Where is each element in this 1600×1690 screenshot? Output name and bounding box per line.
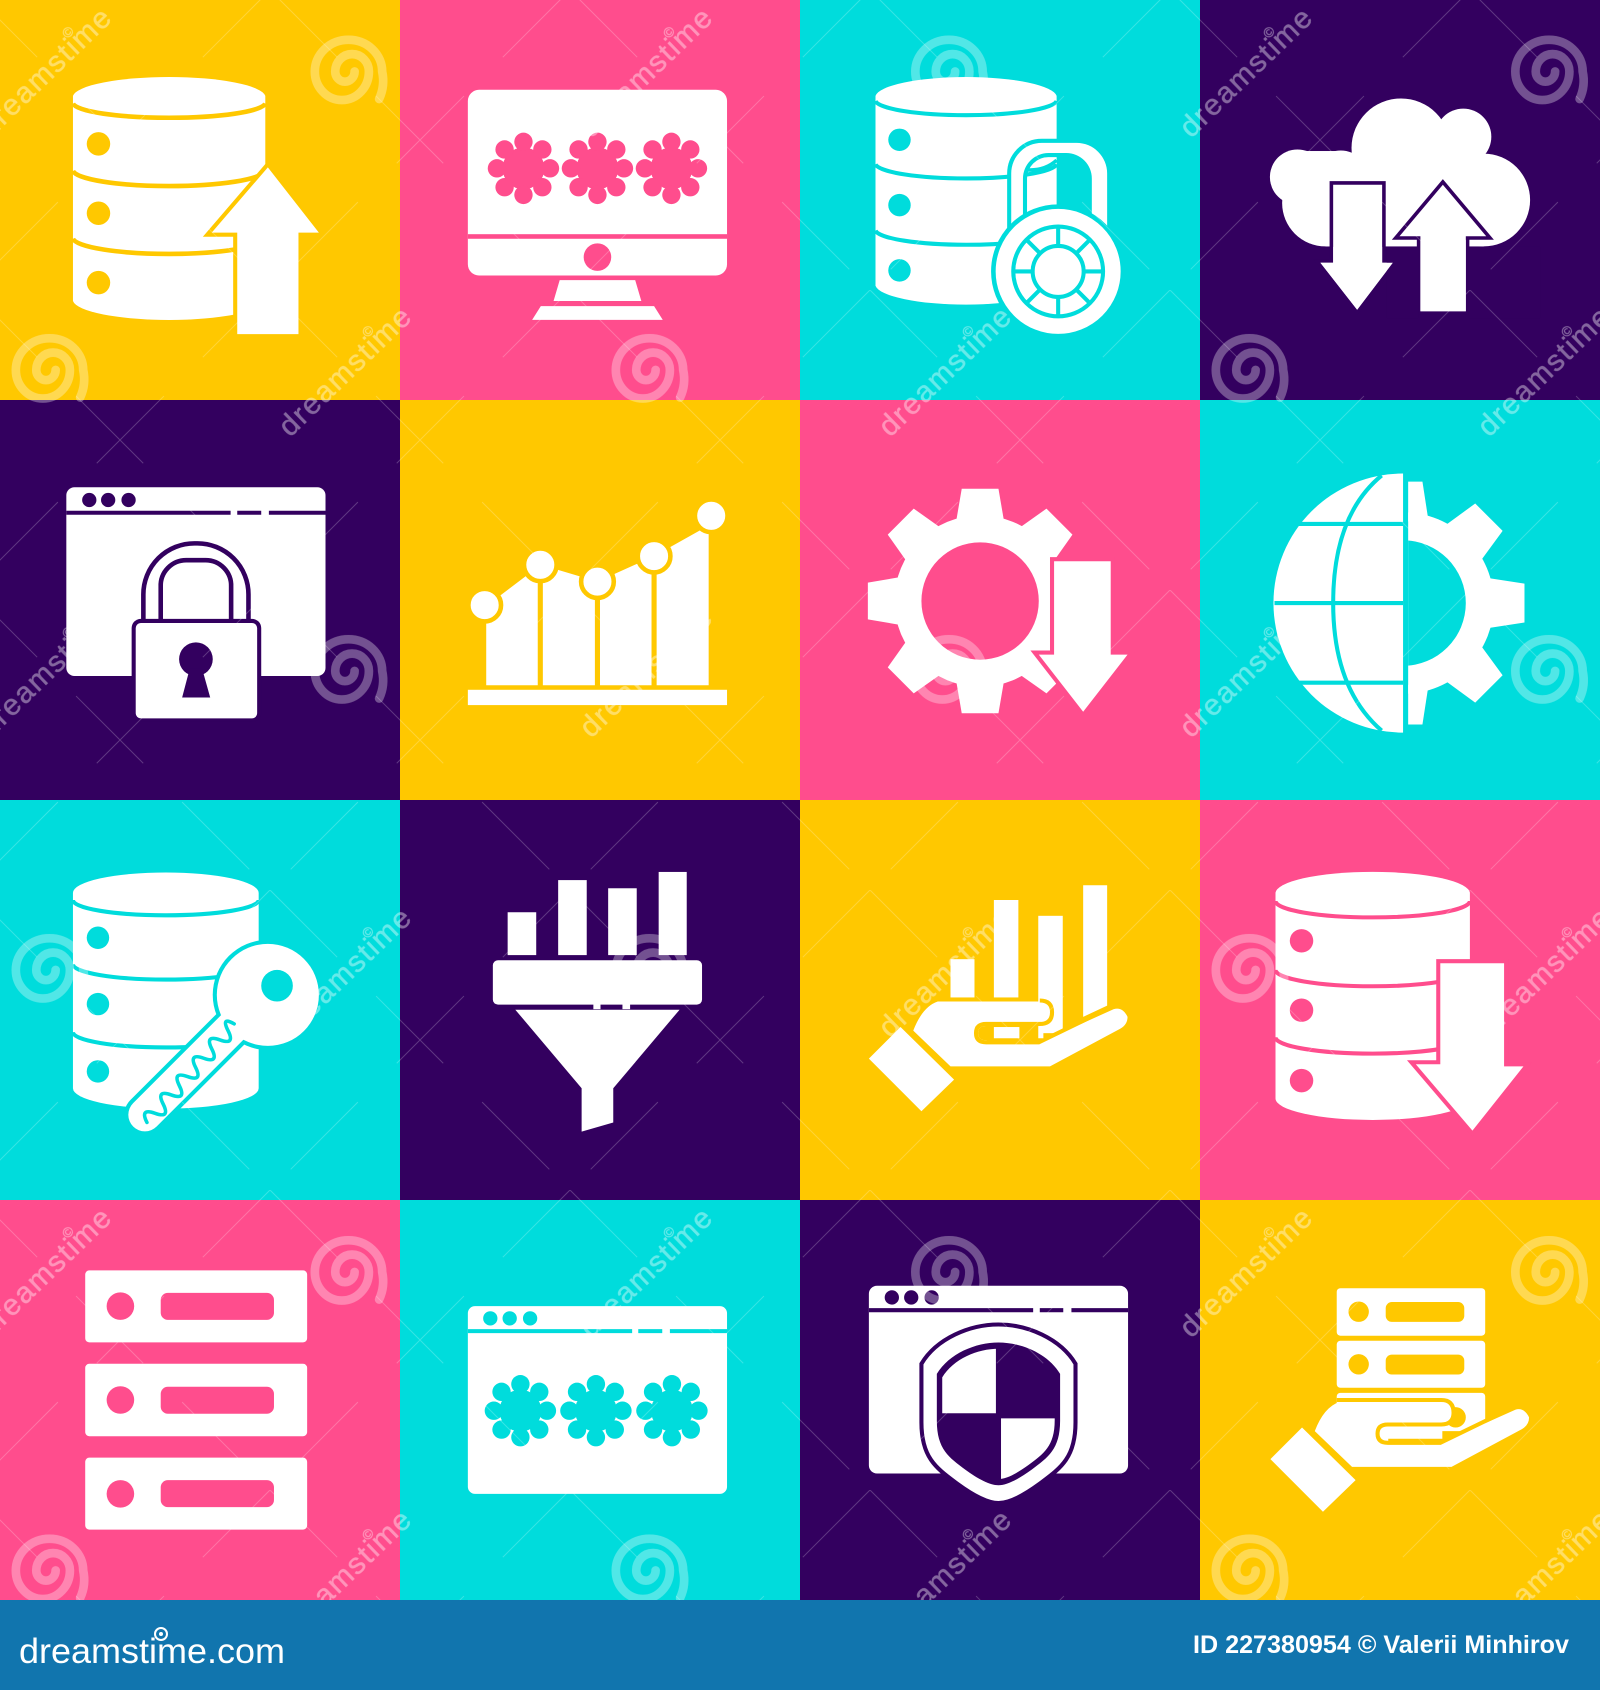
watermark: dreamstime diagonal text: © xyxy=(1557,1524,1576,1543)
icon: cloud with download and upload arrows xyxy=(1270,98,1540,318)
watermark: dreamstime diagonal text: © xyxy=(58,22,77,41)
icon: browser window with padlock xyxy=(66,487,326,722)
icon: database with combination lock xyxy=(876,77,1123,336)
watermark: dreamstime diagonal text: dreamstime xyxy=(272,1502,419,1646)
icon: database with download arrow xyxy=(1276,872,1523,1131)
watermark: dreamstime diagonal text: © xyxy=(358,922,377,941)
watermark: dreamstime diagonal text: dreamstime xyxy=(272,900,419,1044)
watermark: dreamstime diagonal text: dreamstime xyxy=(1173,600,1320,744)
watermark: dreamstime diagonal text: © xyxy=(958,321,977,340)
icon: funnel filtering bar chart xyxy=(493,872,702,1132)
watermark: dreamstime diagonal text: © xyxy=(358,1524,377,1543)
footer bar xyxy=(0,1600,1600,1690)
watermark: dreamstime diagonal text: © xyxy=(358,321,377,340)
watermark: dreamstime diagonal text: © xyxy=(958,1524,977,1543)
watermark: dreamstime diagonal text: © xyxy=(1259,1222,1278,1241)
icon: browser window with password asterisks xyxy=(468,1306,727,1494)
watermark: dreamstime diagonal text: dreamstime xyxy=(872,900,1019,1044)
watermark: dreamstime diagonal text: dreamstime xyxy=(872,1502,1019,1646)
watermark: dreamstime diagonal text: © xyxy=(1259,22,1278,41)
watermark: dreamstime diagonal text: © xyxy=(58,1222,77,1241)
icon: gear with down arrow xyxy=(868,489,1128,713)
watermark: dreamstime diagonal text: dreamstime xyxy=(1173,1200,1320,1344)
watermark: dreamstime diagonal text: © xyxy=(58,622,77,641)
icon: database with key xyxy=(73,872,323,1128)
watermark: dreamstime diagonal text: © xyxy=(659,622,678,641)
watermark: dreamstime diagonal text: © xyxy=(958,922,977,941)
icon: database with upload arrow xyxy=(73,77,319,334)
footer logo text: dreamstime.com: dreamstime.com xyxy=(19,1632,285,1671)
icon: browser window with shield xyxy=(869,1286,1128,1511)
icon: hand holding server xyxy=(1270,1288,1529,1512)
watermark: dreamstime diagonal text: © xyxy=(1557,321,1576,340)
icon: server rack rows xyxy=(85,1270,307,1530)
watermark: dreamstime diagonal text: dreamstime xyxy=(872,299,1019,443)
icon: hand holding bar chart xyxy=(869,885,1128,1111)
watermark: dreamstime diagonal text: dreamstime xyxy=(272,299,419,443)
watermark: dreamstime diagonal text: dreamstime xyxy=(573,600,720,744)
watermark: dreamstime diagonal text: © xyxy=(1259,622,1278,641)
watermark: dreamstime diagonal text: © xyxy=(1557,922,1576,941)
icon: half globe half gear xyxy=(1273,473,1524,733)
watermark: dreamstime diagonal text: dreamstime xyxy=(1173,0,1320,144)
watermark: dreamstime diagonal text: © xyxy=(659,22,678,41)
watermark: dreamstime diagonal text: dreamstime xyxy=(573,1200,720,1344)
icon: monitor with password asterisks xyxy=(468,90,727,320)
footer credit text: ID 227380954 © Valerii Minhirov xyxy=(1193,1631,1569,1659)
icon: area chart with data points xyxy=(468,499,728,705)
watermark: dreamstime diagonal text: dreamstime xyxy=(573,0,720,144)
watermark: dreamstime diagonal text: © xyxy=(659,1222,678,1241)
